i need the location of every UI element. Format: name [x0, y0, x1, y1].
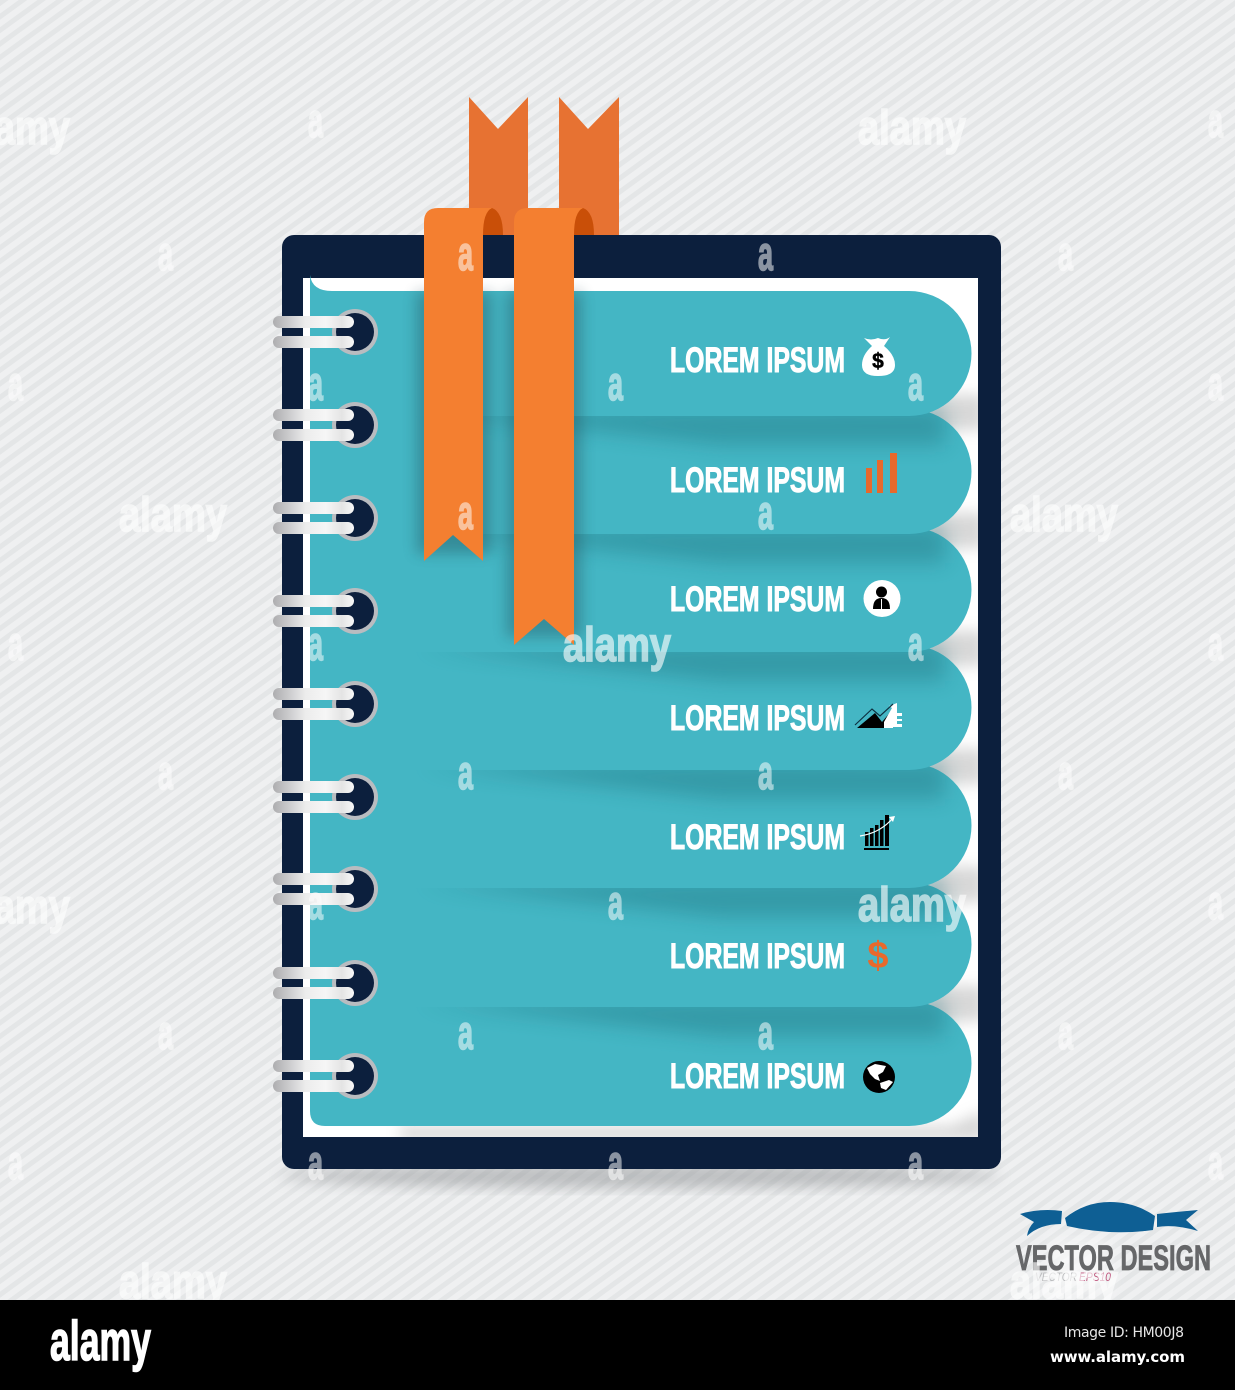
icon: mountain growth chart — [855, 703, 902, 728]
watermark letters: a — [8, 358, 23, 411]
tab 1 shadow — [420, 407, 945, 445]
logo ribbon — [1020, 1202, 1198, 1236]
page edge shadows — [400, 395, 985, 1140]
watermark letters: a — [308, 95, 323, 148]
watermark letters: a — [458, 747, 473, 800]
label 4: LOREM IPSUM — [670, 699, 845, 738]
watermark letters: a — [1208, 877, 1223, 930]
watermark letters: a — [908, 618, 923, 671]
watermark words: alamy — [119, 489, 227, 542]
icon: bar chart — [866, 453, 897, 493]
icon: money bag — [862, 337, 895, 376]
watermark letters: a — [458, 1007, 473, 1060]
tab 6 shadow — [420, 998, 945, 1036]
watermark letters: a — [158, 1007, 173, 1060]
icon: dollar sign: $ — [867, 935, 889, 977]
watermark letters: a — [458, 487, 473, 540]
watermark letters: a — [1058, 1007, 1073, 1060]
icon: rising bars with arrow — [860, 815, 895, 850]
tab 1 — [310, 275, 972, 416]
watermark words: alamy — [119, 1256, 227, 1309]
label 3: LOREM IPSUM — [670, 580, 845, 619]
spiral binding — [273, 309, 378, 1099]
watermark letters: a — [758, 1007, 773, 1060]
tab 6 — [310, 882, 972, 1007]
front ribbon left — [424, 208, 503, 561]
label 7: LOREM IPSUM — [670, 1057, 845, 1096]
watermark letters: a — [158, 747, 173, 800]
notebook cover — [282, 235, 1001, 1169]
watermark letters: a — [908, 1137, 923, 1190]
tab 4 — [310, 645, 972, 770]
ring 4 — [273, 588, 378, 634]
watermark letters: a — [458, 228, 473, 281]
tab 2 — [310, 409, 972, 534]
footer url: www.alamy.com — [1050, 1348, 1185, 1366]
watermark words: alamy — [1010, 1256, 1118, 1309]
white page — [303, 278, 978, 1137]
row labels — [670, 341, 845, 1096]
notebook ground shadow — [280, 1164, 1000, 1188]
watermark letters: a — [1208, 1137, 1223, 1190]
watermark letters: a — [308, 1137, 323, 1190]
image id: Image ID: HM00J8 — [1064, 1325, 1184, 1341]
watermark letters: a — [308, 618, 323, 671]
ring 7 — [273, 866, 378, 912]
watermark letters: a — [1208, 618, 1223, 671]
tab 3 — [310, 527, 972, 652]
label 1: LOREM IPSUM — [670, 341, 845, 380]
icon: money bag: $ — [872, 350, 884, 373]
ring 5 — [273, 681, 378, 727]
icon: person — [864, 580, 900, 617]
ribbon shadows — [416, 292, 582, 637]
watermark words: alamy — [858, 102, 966, 155]
ring 6 — [273, 774, 378, 820]
ring 9 — [273, 1053, 378, 1099]
watermark letters: a — [308, 877, 323, 930]
front ribbon right — [514, 208, 594, 645]
tab stack — [310, 275, 972, 1126]
watermark letters: a — [1058, 228, 1073, 281]
watermark letters: a — [758, 228, 773, 281]
watermark letters: a — [1208, 95, 1223, 148]
ring 2 — [273, 402, 378, 448]
logo subtitle: VECTOR — [1035, 1270, 1077, 1284]
watermark words: alamy — [563, 619, 671, 672]
ring 8 — [273, 960, 378, 1006]
watermark words — [0, 102, 1118, 1309]
watermark letters: a — [758, 487, 773, 540]
ring 1 — [273, 309, 378, 355]
ring 3 — [273, 495, 378, 541]
tab 5 — [310, 763, 972, 888]
watermark words: alamy — [1010, 489, 1118, 542]
vector design logo — [1016, 1202, 1211, 1290]
tab 2 shadow — [420, 525, 945, 563]
watermark letters: a — [8, 618, 23, 671]
watermark letters — [8, 95, 1223, 1190]
label 2: LOREM IPSUM — [670, 461, 845, 500]
watermark letters: a — [608, 1137, 623, 1190]
watermark letters: a — [1058, 747, 1073, 800]
watermark letters: a — [1208, 358, 1223, 411]
tab 5 shadow — [420, 879, 945, 917]
back ribbon tails — [469, 97, 619, 236]
footer logo: alamy — [50, 1309, 151, 1372]
watermark letters: a — [158, 228, 173, 281]
white smudge — [1050, 1240, 1110, 1290]
footer bar — [0, 1300, 1235, 1390]
label 6: LOREM IPSUM — [670, 937, 845, 976]
logo eps: EPS10 — [1079, 1270, 1111, 1284]
tab 3 shadow — [420, 643, 945, 681]
watermark words: alamy — [858, 879, 966, 932]
icon: globe — [863, 1061, 895, 1093]
watermark letters: a — [758, 747, 773, 800]
tab 7 — [310, 1001, 972, 1126]
watermark letters: a — [908, 358, 923, 411]
watermark letters: a — [308, 358, 323, 411]
tab 4 shadow — [420, 761, 945, 799]
watermark letters: a — [608, 877, 623, 930]
label 5: LOREM IPSUM — [670, 818, 845, 857]
watermark letters: a — [608, 358, 623, 411]
watermark letters: a — [8, 1137, 23, 1190]
